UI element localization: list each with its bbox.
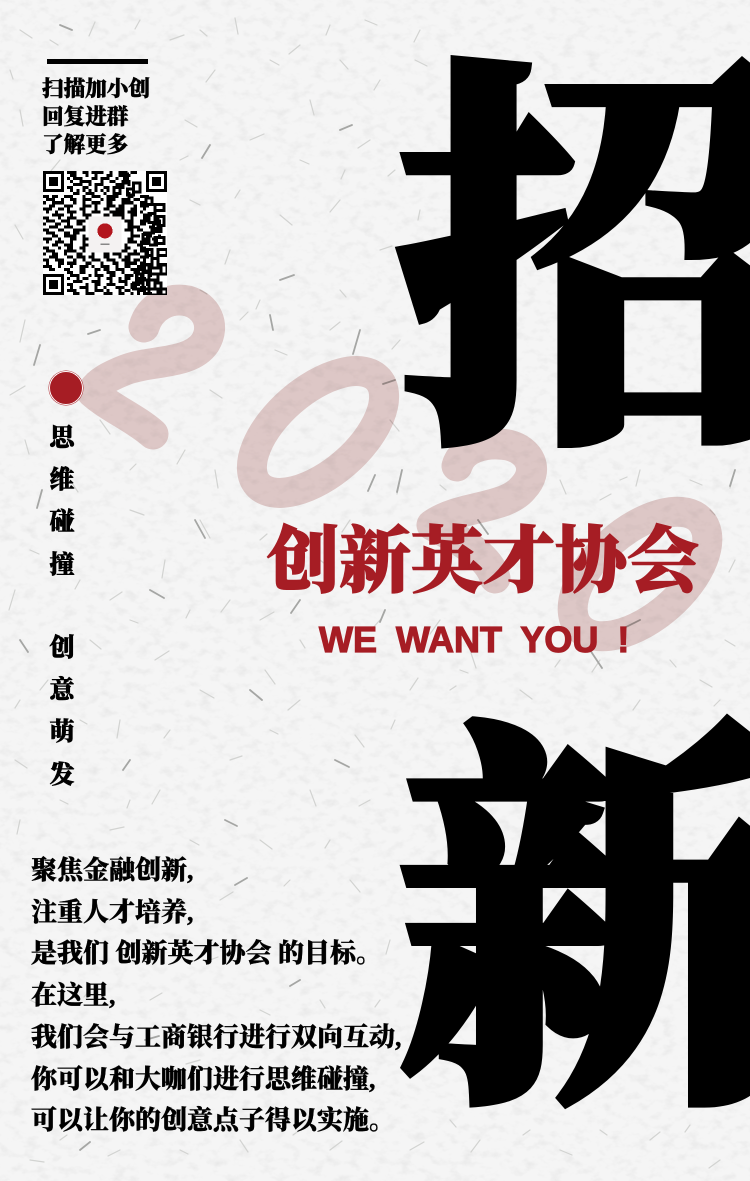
vertical text: 思维碰撞: 维 — [49, 467, 74, 494]
QR caption: 了解更多 — [42, 133, 128, 157]
QR caption — [42, 76, 150, 157]
body paragraph: 在这里, — [31, 981, 116, 1010]
QR caption: 扫描加小创 — [42, 77, 150, 101]
vertical text: 创意萌发 — [49, 634, 74, 789]
title: association name: 创新英才协会 — [267, 522, 699, 602]
vertical text: 思维碰撞: 碰 — [49, 509, 74, 536]
vertical text: 创意萌发: 创 — [49, 635, 74, 662]
vertical text: 创意萌发: 萌 — [49, 719, 74, 746]
body paragraph: 我们会与工商银行进行双向互动, — [31, 1023, 402, 1052]
body paragraph: 注重人才培养, — [31, 898, 194, 927]
QR caption: 回复进群 — [42, 105, 128, 129]
body paragraph: 你可以和大咖们进行思维碰撞, — [31, 1065, 376, 1094]
vertical text: 思维碰撞: 撞 — [49, 552, 74, 579]
QR code — [43, 171, 167, 295]
body paragraph — [31, 856, 402, 1135]
top bar — [47, 59, 148, 64]
body paragraph: 聚焦金融创新, — [31, 856, 194, 885]
vertical text: 思维碰撞: 思 — [49, 425, 74, 452]
body paragraph: 是我们 创新英才协会 的目标。 — [31, 939, 382, 968]
vertical text: 创意萌发: 意 — [49, 677, 74, 704]
vertical text: 思维碰撞 — [49, 424, 75, 579]
vertical text: 创意萌发: 发 — [49, 762, 74, 789]
subtitle: WE WANT YOU ! — [319, 619, 629, 660]
red dot — [49, 371, 83, 405]
body paragraph: 可以让你的创意点子得以实施。 — [31, 1106, 395, 1135]
